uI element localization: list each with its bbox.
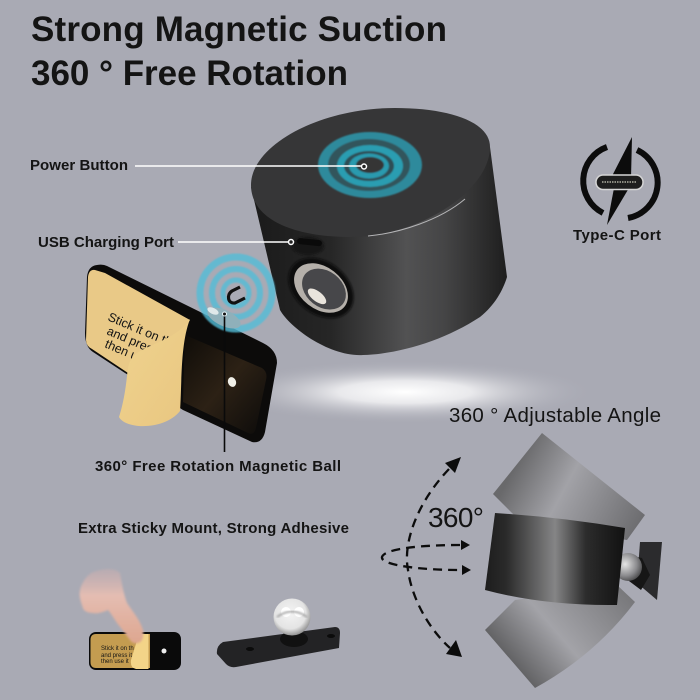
- sticker text: Stick it on th: [101, 646, 134, 652]
- icon: magnet rings: [200, 257, 272, 329]
- connector: [596, 175, 643, 190]
- neck: [280, 631, 308, 647]
- sticker print: and pres: [105, 324, 155, 356]
- rim highlight: [368, 199, 465, 236]
- title: [31, 10, 447, 93]
- magnetic ball label: 360° Free Rotation Magnetic Ball: [95, 458, 341, 475]
- caption: Type-C Port: [573, 227, 661, 244]
- mount being peeled by finger: [80, 569, 181, 670]
- rotation arrows: [382, 469, 460, 648]
- sticker print: Stick it on th: [106, 310, 174, 349]
- mount hole: [227, 376, 237, 388]
- magnetic ball: [204, 303, 244, 333]
- gold sticker: [90, 634, 150, 668]
- hole: [162, 648, 166, 654]
- magnetic ball leader: [222, 312, 226, 452]
- title: 360 ° Free Rotation: [31, 54, 348, 93]
- sticker sheet: [86, 270, 190, 373]
- sticker text: [101, 646, 134, 665]
- title: Strong Magnetic Suction: [31, 10, 447, 49]
- power button label with leader: [30, 157, 366, 174]
- lamp side view: [485, 513, 625, 605]
- sticky mount label: Extra Sticky Mount, Strong Adhesive: [78, 520, 349, 537]
- arrowheads: [445, 457, 471, 657]
- lamp top face: [251, 108, 490, 237]
- ball mount plate: [217, 598, 340, 667]
- product: cylindrical lamp: [251, 108, 507, 355]
- wall mount: [625, 542, 662, 600]
- floor glow: [215, 360, 595, 424]
- black plate: [89, 632, 181, 670]
- chrome ball: [274, 598, 310, 636]
- USB port: [292, 237, 324, 255]
- USB charging port label with leader: [38, 234, 294, 251]
- lightning bolt: [607, 137, 632, 225]
- adjustable angle heading: 360 ° Adjustable Angle: [449, 404, 661, 427]
- rotation diagram: [382, 433, 662, 688]
- magnetic mount with peeled sticker: [85, 265, 277, 442]
- concentric power rings: [318, 132, 422, 198]
- plate sheen: [183, 335, 266, 434]
- lamp body: [251, 147, 507, 355]
- power button label with leader: Power Button: [30, 157, 128, 174]
- sticker text: then use it: [101, 659, 129, 665]
- upper ghost position: [493, 433, 645, 540]
- USB charging port label with leader: USB Charging Port: [38, 234, 174, 251]
- screw holes: [246, 647, 254, 651]
- base plate: [217, 627, 340, 667]
- mount plate: [85, 265, 277, 442]
- peeled flap: [119, 319, 190, 426]
- lens: [277, 245, 365, 331]
- icon: Type-C port: [573, 137, 661, 244]
- circular arcs: [583, 147, 607, 213]
- ball joint: [614, 553, 642, 581]
- sticker print: then u: [103, 337, 140, 363]
- 360 degree label: 360°: [428, 502, 484, 533]
- magnet glyph: [228, 287, 245, 303]
- finger: [80, 569, 143, 643]
- lower ghost position: [485, 585, 635, 688]
- sticker flap: [131, 634, 148, 669]
- sticker text: and press it: [101, 653, 132, 659]
